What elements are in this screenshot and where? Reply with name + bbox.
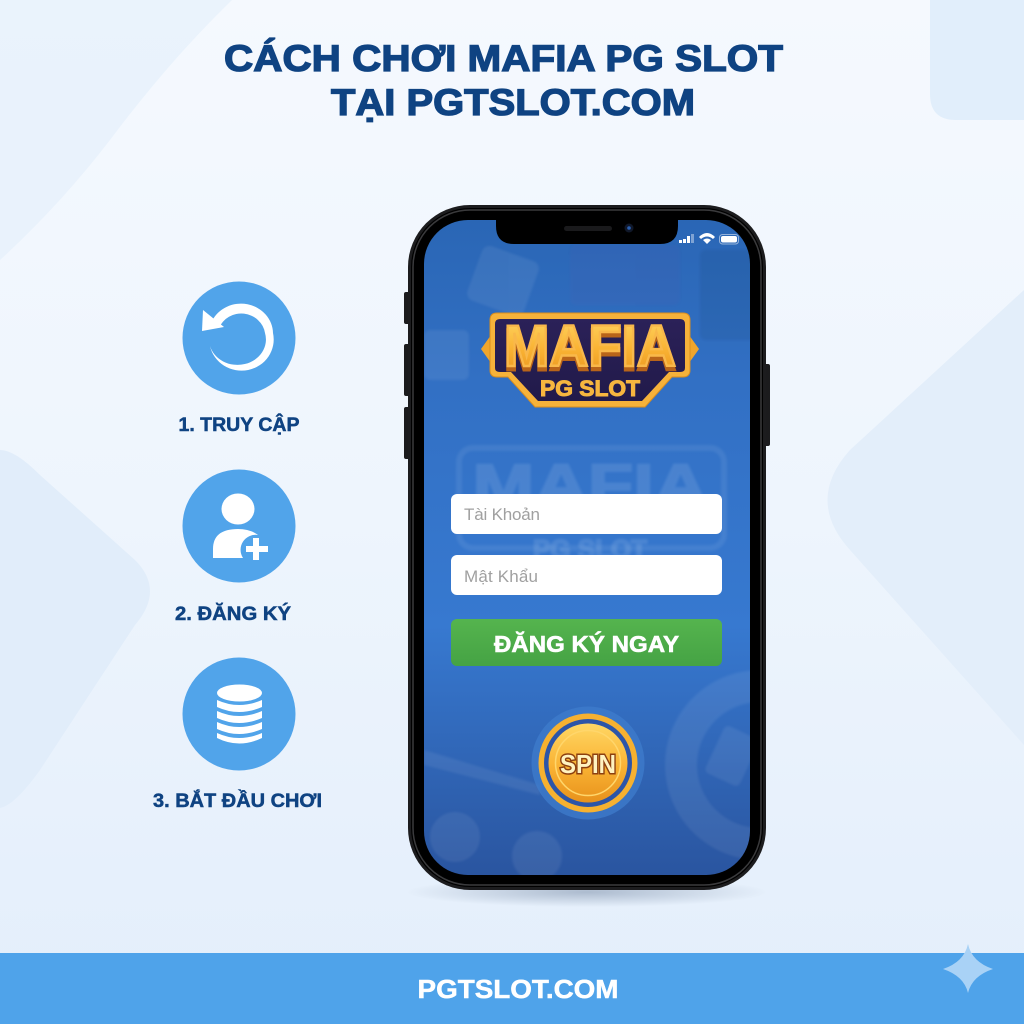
input: mật khẩu: Mật Khẩu bbox=[464, 567, 538, 586]
label: 1. TRUY CẬP bbox=[178, 414, 300, 436]
button: đăng ký ngay bbox=[451, 619, 722, 666]
faded watermark logo: MAFIA bbox=[472, 453, 708, 518]
game logo bbox=[481, 313, 699, 407]
footer banner bbox=[0, 944, 1024, 1024]
faded watermark logo bbox=[476, 463, 702, 555]
status icons bbox=[679, 233, 738, 244]
game logo: MAFIA bbox=[504, 314, 676, 379]
phone screen bbox=[424, 220, 760, 881]
step 2: đăng ký bbox=[175, 470, 296, 625]
game logo: PG SLOT bbox=[540, 376, 641, 401]
title bbox=[224, 38, 783, 123]
faded watermark logo: PG SLOT bbox=[533, 534, 647, 564]
label: 2. ĐĂNG KÝ bbox=[175, 603, 291, 625]
title: TẠI PGTSLOT.COM bbox=[331, 82, 695, 123]
title: CÁCH CHƠI MAFIA PG SLOT bbox=[224, 38, 783, 79]
step 3: bắt đầu chơi bbox=[153, 658, 322, 812]
spin button: SPIN bbox=[560, 749, 616, 779]
game logo: MAFIA bbox=[504, 318, 676, 383]
icon: coin stack bbox=[217, 684, 262, 744]
faded game background bbox=[424, 243, 760, 881]
icon: add user bbox=[213, 494, 268, 560]
notch bbox=[496, 220, 678, 244]
button: đăng ký ngay: ĐĂNG KÝ NGAY bbox=[494, 630, 679, 657]
icon: sparkle bbox=[943, 944, 993, 993]
phone mockup bbox=[404, 205, 770, 907]
step 1: truy cập bbox=[178, 282, 300, 436]
input: tài khoản bbox=[451, 494, 722, 534]
side buttons bbox=[404, 292, 770, 459]
footer banner: PGTSLOT.COM bbox=[418, 974, 618, 1004]
input: tài khoản: Tài Khoản bbox=[464, 505, 540, 524]
input: mật khẩu bbox=[451, 555, 722, 595]
label: 3. BẮT ĐẦU CHƠI bbox=[153, 790, 322, 812]
spin button bbox=[532, 706, 644, 820]
icon: return arrow bbox=[202, 304, 274, 371]
